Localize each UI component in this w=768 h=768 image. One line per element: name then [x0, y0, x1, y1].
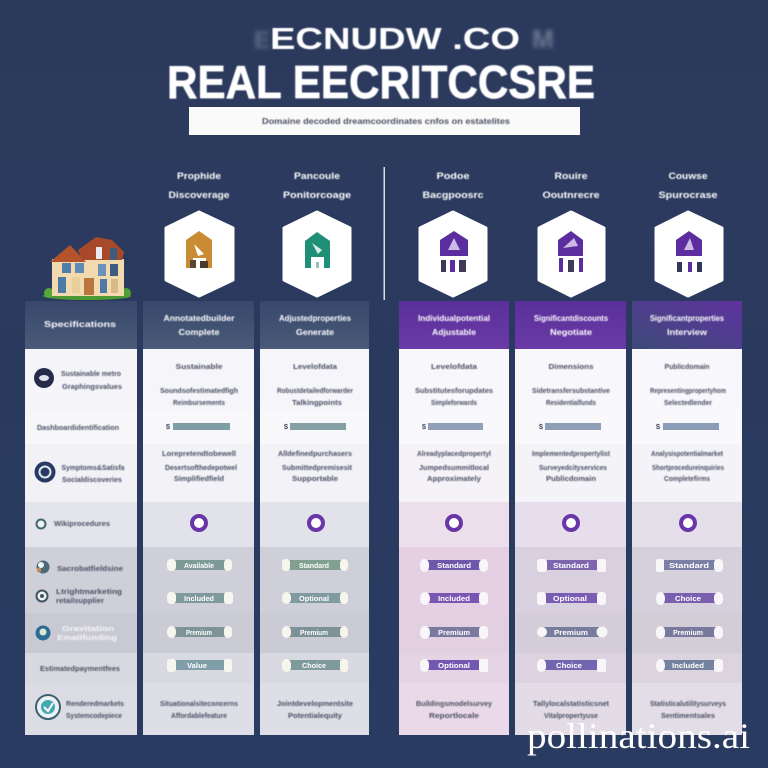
panel: feature labels column: Symptoms&Satisfa [62, 463, 125, 472]
panel: option column 2: Supportable [292, 474, 338, 483]
panel: option column 5: Significantproperties [650, 314, 725, 323]
panel: option column 3: Simpleforwards [431, 398, 477, 407]
pill tag [282, 626, 348, 638]
panel: option column 2: Jointdevelopmentsite [277, 699, 353, 708]
panel: feature labels column: Specifications [44, 320, 117, 329]
panel: option column 2: Talkingpoints [292, 398, 342, 407]
column titles: Rouire [554, 171, 588, 181]
pill tag [167, 659, 232, 672]
panel: option column 1: Soundsofestimatedfigh [160, 386, 238, 395]
panel: feature labels column: retailsupplier [56, 596, 104, 605]
icon tile: green property [284, 212, 350, 296]
pill tag [167, 559, 232, 571]
icon: ring badge [36, 590, 48, 602]
column titles: Discoverage [168, 190, 230, 200]
panel: option column 5: Publicdomain [664, 362, 710, 371]
pill tag: Optional [299, 596, 329, 603]
panel: option column 3: Adjustable [432, 328, 477, 337]
panel: option column 3: Substitutesforupdates [415, 386, 493, 395]
pill tag [282, 659, 348, 672]
panel: option column 4: Tallylocalstatisticsnet [533, 699, 609, 708]
panel: option column 5: Representingpropertyhom [650, 386, 726, 395]
pill tag: Choice [302, 663, 326, 670]
pill tag: Optional [438, 663, 470, 670]
panel: option column 4: Residentialfunds [546, 398, 596, 407]
pill tag: Value [187, 663, 207, 670]
icon tile: purple property two [539, 212, 604, 296]
price bar [422, 422, 483, 431]
panel: option column 4: Implementedpropertylist [532, 449, 610, 458]
column titles: Bacgpoosrc [422, 190, 484, 200]
price bar [166, 422, 230, 431]
watermark: pollinations.ai [527, 716, 750, 756]
column titles: Ooutnrecre [542, 190, 600, 200]
panel: option column 2: Robustdetailedforwarder [277, 386, 353, 395]
panel: option column 5: Shortprocedureinquiries [652, 463, 724, 472]
divider between column groups [384, 167, 385, 300]
column titles: Couwse [668, 171, 708, 181]
panel: option column 3: Levelofdata [431, 362, 478, 371]
panel: feature labels column: Sustainable metro [61, 369, 121, 378]
pill tag [420, 592, 488, 605]
pill tag [282, 559, 348, 571]
panel: option column 4: Dimensions [548, 362, 594, 371]
panel: option column 2: Generate [296, 328, 335, 337]
panel: option column 5: Sentimentsales [661, 711, 715, 720]
pill tag: Premium [186, 630, 212, 637]
pill tag [167, 592, 233, 604]
pill tag: Choice [556, 663, 582, 670]
panel: option column 3: Individualpotential [418, 314, 490, 323]
icon: feature badge one [34, 368, 54, 388]
panel: option column 1: Desertsofthedepotwel [165, 463, 237, 472]
panel: feature labels column [25, 301, 137, 735]
pill tag: Included [672, 663, 704, 670]
icon tile: purple property one [420, 212, 486, 296]
panel: option column 5: Completefirms [664, 474, 710, 483]
panel: feature labels column: Ltrightmarketing [56, 587, 122, 596]
pill tag: Included [438, 596, 470, 603]
pill tag: Premium [300, 630, 328, 637]
icon: orange and teal badge [36, 560, 50, 574]
panel: option column 5 [632, 301, 742, 735]
panel: option column 1: Sustainable [176, 362, 222, 371]
panel: option column 3 [399, 301, 509, 735]
panel: option column 1 [143, 301, 254, 735]
status badge [192, 516, 206, 530]
column titles: Pancoule [294, 171, 340, 181]
pill tag: Choice [675, 596, 701, 603]
faded brand edge left: E [254, 27, 270, 54]
status badge [681, 516, 695, 530]
pill tag [656, 659, 723, 672]
icon tile: purple property three [656, 212, 722, 296]
pill tag [537, 626, 608, 638]
price bar [656, 422, 719, 431]
panel: option column 4: Significantdiscounts [534, 314, 609, 323]
panel: feature labels column: Renderedmarkets [66, 699, 124, 708]
panel: option column 5: Statisticalutilitysurveys [650, 699, 726, 708]
icon: house illustration [43, 237, 131, 300]
panel: option column 2 [260, 301, 369, 735]
panel: option column 1: Simplifiedfield [174, 474, 224, 483]
pill tag [420, 626, 488, 639]
icon: feature badge two [34, 462, 56, 482]
panel: option column 4: Publicdomain [546, 474, 596, 483]
panel: option column 3: Jumpedsummitlocal [419, 463, 489, 472]
pill tag [167, 626, 232, 638]
panel: option column 1: Reimbursements [173, 398, 225, 407]
panel: option column 2: Potentialequity [288, 711, 343, 720]
brand heading: ECNUDW .CO [270, 21, 520, 56]
panel: option column 5: Selectedlender [664, 398, 712, 407]
pill tag: Optional [553, 596, 587, 603]
pill tag [420, 659, 488, 672]
panel: option column 1: Situationalsiteconcerns [160, 699, 238, 708]
status badge [564, 516, 578, 530]
panel: option column 4: Sidetransfersubstantive [532, 386, 610, 395]
panel: option column 3: Alreadyplacedpropertyl [417, 449, 491, 458]
icon tile: orange property [166, 212, 233, 296]
pill tag: Standard [299, 563, 329, 570]
price bar [539, 422, 601, 431]
icon: round seal [36, 695, 60, 719]
price bar: $ [166, 422, 171, 431]
price bar: $ [422, 422, 427, 431]
pill tag: Premium [673, 630, 703, 637]
panel: feature labels column: Estimatedpaymentfees [40, 664, 120, 673]
column titles [168, 171, 718, 200]
price bar: $ [284, 422, 289, 431]
panel: feature labels column: Socialdiscoveries [62, 475, 122, 484]
panel: feature labels column: Gravitation [62, 624, 115, 633]
panel: option column 4: Vitalpropertyuse [544, 711, 598, 720]
column titles: Prophide [177, 171, 221, 181]
panel: option column 5: Interview [667, 328, 708, 337]
panel: option column 2: Alldefinedpurchasers [278, 449, 352, 458]
panel: option column 1: Affordablefeature [171, 711, 227, 720]
panel: option column 3: Buildingsmodelsurvey [416, 699, 493, 708]
price bar: $ [539, 422, 544, 431]
pill tag [656, 592, 723, 605]
subtitle banner: Domaine decoded dreamcoordinates cnfos on estatelites [262, 117, 511, 126]
panel: feature labels column: Sacrobatfieldsine [57, 564, 123, 573]
panel: option column 2: Levelofdata [293, 362, 338, 371]
pill tag [656, 559, 723, 572]
icon: blue badge [36, 626, 50, 640]
pill tag: Included [184, 596, 214, 603]
panel: option column 4: Negotiate [550, 328, 593, 337]
status badge [447, 516, 461, 530]
pill tag: Premium [438, 630, 470, 637]
price bar [284, 422, 346, 431]
pill tag: Standard [553, 563, 589, 570]
column titles: Spurocrase [658, 190, 718, 200]
price bar: $ [656, 422, 661, 431]
panel: option column 1: Complete [178, 328, 220, 337]
pill tag [537, 559, 606, 572]
pill tag [537, 592, 606, 605]
column titles: Ponitorcoage [283, 190, 351, 200]
pill tag: Premium [554, 630, 588, 637]
pill tag [282, 592, 348, 604]
column titles: Podoe [436, 171, 470, 181]
pill tag: Standard [437, 563, 471, 570]
status badge [309, 516, 323, 530]
panel: feature labels column: Wikiprocedures [54, 519, 110, 528]
panel: feature labels column: Graphingsvalues [62, 382, 122, 391]
panel: option column 1: Annotatedbuilder [164, 314, 234, 323]
pill tag [656, 626, 723, 639]
subtitle banner [189, 107, 580, 135]
panel: option column 2: Adjustedproperties [279, 314, 352, 323]
panel: option column 3: Reportlocale [429, 711, 479, 720]
panel: feature labels column: Systemcodepiece [66, 711, 122, 720]
panel: option column 4 [515, 301, 626, 735]
panel: feature labels column: Dashboardidentification [37, 423, 119, 432]
faded brand edge right: M [532, 24, 554, 54]
panel: option column 1: Lorepretendtobewell [162, 449, 236, 458]
panel: option column 2: Submittedpremisesit [282, 463, 352, 472]
pill tag: Available [184, 563, 214, 570]
icon: feature ring [36, 520, 46, 528]
panel: option column 3: Approximately [427, 474, 482, 483]
pill tag: Standard [669, 563, 709, 570]
panel: option column 5: Analysispotentialmarket [651, 449, 723, 458]
panel: feature labels column: Emailfunding [57, 633, 118, 642]
panel: option column 4: Surveyedcityservices [539, 463, 607, 472]
main title: REAL EECRITCCSRE [167, 56, 595, 108]
pill tag [420, 559, 488, 572]
pill tag [537, 659, 606, 672]
